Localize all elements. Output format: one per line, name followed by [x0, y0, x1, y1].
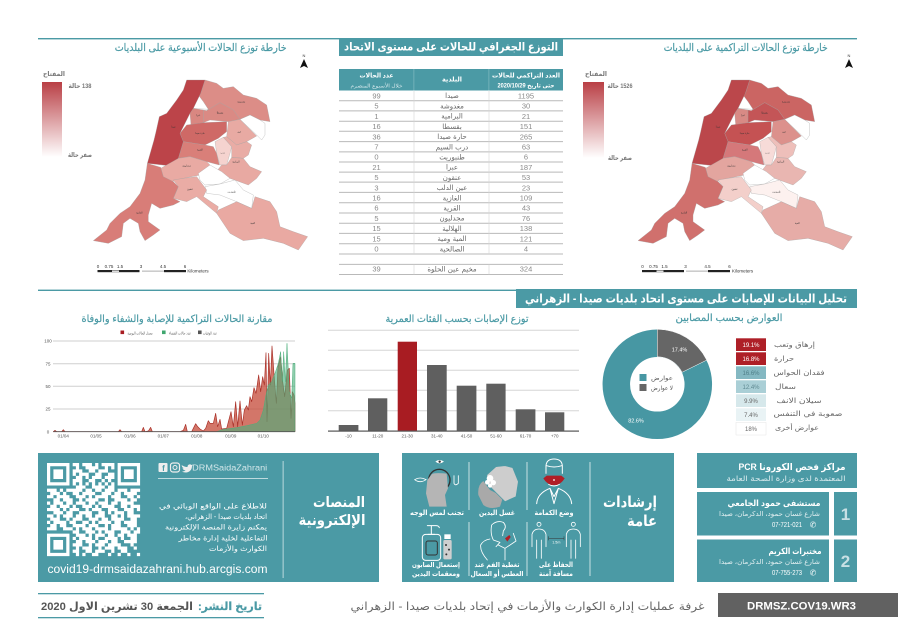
map title: weekly: خارطة توزع الحالات الأسبوعية على البلديات	[115, 41, 287, 54]
scale bar: weekly: 1.5	[117, 264, 124, 269]
map legend: cumulative: المفتاح	[585, 71, 607, 78]
table rows: صيدا	[445, 92, 459, 100]
x axis labels: 01/10	[258, 434, 269, 438]
choropleth map: cumulative: طنبوريت	[772, 190, 781, 193]
table rows: 16	[372, 122, 381, 131]
social rule	[158, 477, 268, 480]
table grid	[339, 101, 563, 274]
platforms title	[298, 495, 366, 529]
choropleth map: cumulative: درب	[765, 151, 770, 154]
number 1	[834, 492, 857, 536]
y axis labels: 75	[45, 361, 51, 366]
symptom list: 12.4%	[742, 385, 760, 391]
chart legend: عدد الوفيات	[203, 332, 217, 336]
choropleth map: weekly	[93, 80, 308, 250]
platform description: الكوارث والأزمات	[209, 544, 267, 553]
table rows: القرية	[443, 204, 461, 212]
table rows: 5	[374, 214, 379, 223]
table rows: حارة صيدا	[437, 133, 467, 141]
choropleth map: cumulative: عنقون	[732, 188, 738, 191]
choropleth map: cumulative: عين	[782, 130, 787, 133]
table rows: 53	[522, 173, 530, 182]
choropleth map: weekly: عين	[237, 130, 242, 133]
x axis labels: 31-40	[431, 434, 443, 438]
footer: report code: DRMSZ.COV19.WR3	[747, 600, 856, 612]
panel: PCR centres	[697, 453, 857, 582]
icon: wash hands	[478, 466, 518, 508]
panel: cumulative comparison chart	[44, 314, 295, 438]
number 1: 1	[841, 505, 850, 524]
chart title: توزع الإصابات بحسب الفئات العمرية	[386, 314, 529, 325]
table rows: 16	[372, 194, 381, 202]
table rows: 76	[522, 214, 530, 223]
donut chart	[616, 329, 707, 425]
panel: weekly cases map	[42, 41, 308, 274]
choropleth map: weekly: مغدوشة	[237, 101, 246, 104]
symptom list: صعوبة في التنفس	[774, 411, 843, 418]
label: cover mouth: العطس أو السعال	[470, 569, 524, 578]
x axis labels: 01/05	[90, 434, 102, 438]
dividers	[469, 462, 590, 576]
platform description: للاطلاع على الواقع الوبائي في	[159, 502, 267, 510]
choropleth map: cumulative: المية	[795, 222, 800, 225]
scale bar: cumulative: 6	[728, 264, 731, 269]
table rows: 324	[520, 265, 532, 274]
table rows: 5	[374, 173, 379, 182]
choropleth map: weekly: بقسطا	[216, 111, 224, 114]
table rows: 63	[522, 142, 530, 152]
scale bar: weekly: 0	[97, 264, 100, 269]
table rows: 15	[372, 234, 381, 243]
footer: operations room: غرفة عمليات إدارة الكوارث والأزمات في إتحاد بلديات صيدا - الزهراني	[350, 599, 705, 613]
symptom list: سعال	[775, 384, 796, 391]
donut chart: 82.6%	[628, 418, 644, 424]
centre 1: مستشفى حمود الجامعي	[728, 498, 820, 509]
section rule	[38, 290, 516, 291]
choropleth map: cumulative: مجدليون	[727, 165, 736, 168]
table rows: عنقون	[443, 174, 461, 182]
choropleth map: weekly: حارة صيدا	[195, 132, 205, 135]
icon: north arrow: N	[303, 53, 306, 58]
chart grid	[53, 341, 295, 409]
donut chart: لا عوارض	[651, 385, 673, 392]
panel: age group bar chart	[328, 314, 579, 438]
choropleth map: cumulative: عبرا	[741, 114, 746, 117]
choropleth map: weekly: القرية	[197, 149, 203, 152]
chart legend	[120, 330, 217, 336]
table rows: 99	[372, 91, 381, 100]
table rows: مغدوشة	[440, 102, 464, 110]
map legend: cumulative: صفر حالة	[608, 155, 632, 162]
table rows: المية ومية	[437, 235, 467, 243]
icon: safe distance	[532, 522, 580, 558]
panel: online platforms	[38, 453, 379, 582]
choropleth map: weekly: المية	[250, 222, 255, 225]
platform description: يمكنم زايرة المنصة الإلكترونية	[165, 522, 267, 532]
table rows: 0	[374, 245, 379, 254]
label: soap and sanitizer: إستعمال الصابون	[412, 562, 460, 569]
symptom list: إرهاق وتعب	[774, 342, 815, 349]
PCR header: مراكز فحص الكورونا PCR	[738, 462, 846, 473]
social handle: DRMSaidaZahrani	[192, 464, 267, 472]
table rows: طنبوريت	[439, 154, 465, 162]
table rows: 1195	[518, 91, 534, 100]
map title: cumulative: خارطة توزع الحالات التراكمية على البلديات	[664, 42, 828, 54]
x axis labels: 01/09	[225, 434, 237, 438]
table header: البلدية	[442, 76, 462, 84]
scale bar: weekly: 0.75	[105, 264, 114, 269]
table rows: الغازية	[443, 194, 461, 202]
x axis labels: 01/06	[124, 434, 136, 438]
scale bar: cumulative: 0.75	[649, 264, 658, 269]
donut chart: عوارض	[651, 375, 673, 382]
section heading: data analysis	[516, 289, 857, 308]
table header: حتى تاريخ 2020/10/29	[498, 82, 554, 90]
map legend: cumulative: 1526 حالة	[608, 83, 633, 90]
table header: عدد الحالات	[360, 72, 394, 80]
label: safe distance: الحفاظ على	[539, 562, 573, 569]
social handle	[158, 463, 267, 473]
symptom list: حرارة	[774, 356, 794, 363]
choropleth map: weekly: طنبوريت	[227, 190, 236, 193]
table rows: 23	[522, 183, 530, 192]
table rows: عبرا	[446, 164, 458, 172]
centre 1	[697, 492, 829, 536]
icon: north arrow	[300, 53, 308, 68]
platform description: اتحاد بلديات صيدا - الزهراني،	[185, 512, 267, 521]
section heading: data analysis: تحليل البيانات للإصابات على مستوى اتحاد بلديات صيدا - الزهراني	[525, 292, 847, 306]
centre 1: ✆	[810, 520, 817, 530]
choropleth map: cumulative: حارة صيدا	[740, 132, 750, 135]
symptom list: 16.6%	[742, 371, 760, 377]
label: wash hands: غسل اليدين	[479, 510, 515, 517]
table rows: 21	[522, 112, 530, 121]
centre 1: شارع غسان حمود، الدكرمان، صيدا	[719, 510, 820, 518]
guidance title: عامة	[627, 513, 657, 530]
symptom list: عوارض أخرى	[775, 423, 819, 432]
scale bar: cumulative: Kilometers	[732, 268, 754, 274]
panel: cases table	[339, 69, 563, 274]
icon: north arrow	[845, 53, 853, 68]
chart title: مقارنة الحالات التراكمية للإصابة والشفاء والوفاة	[82, 314, 272, 325]
y axis labels: 100	[44, 339, 52, 344]
symptom list	[736, 338, 843, 435]
choropleth map: weekly: البرامية	[232, 160, 240, 163]
chart legend: عدد حالات الشفاء	[169, 332, 191, 336]
scale bar: cumulative	[641, 264, 754, 274]
scale bar: cumulative: 4.5	[704, 264, 711, 269]
x axis labels: 61-70	[520, 434, 532, 438]
icon: safe distance: 1.5m	[552, 541, 560, 545]
x axis labels: 70+	[551, 434, 559, 438]
choropleth map: cumulative: مغدوشة	[782, 101, 791, 104]
x axis labels: 10-	[345, 434, 352, 438]
icon: north arrow: N	[848, 53, 851, 58]
y axis labels: 25	[45, 407, 51, 412]
centre 1: 07-721-021	[772, 522, 802, 529]
table rows: 6	[524, 153, 528, 162]
top rule right	[563, 38, 857, 39]
x axis labels: 11-20	[372, 434, 384, 438]
scale bar: weekly: 3	[140, 264, 143, 269]
footer: report code	[718, 593, 898, 617]
table rows: مخيم عين الحلوة	[427, 266, 477, 274]
bars	[339, 342, 564, 431]
platform description: التفاعلية لخلية إدارة مخاطر	[177, 534, 268, 542]
symptom list: سيلان الانف	[776, 398, 822, 405]
area series	[53, 343, 295, 432]
label: soap and sanitizer	[412, 562, 460, 578]
x axis labels: 01/07	[158, 434, 169, 438]
y axis labels	[44, 339, 52, 434]
choropleth map: weekly: مجدليون	[183, 165, 192, 168]
scale bar: cumulative: 0	[641, 264, 644, 269]
table rows: عين الدلب	[437, 184, 467, 192]
centre 2: شارع غسان حمود، الدكرمان، صيدا	[719, 558, 820, 566]
table rows: 1	[374, 112, 379, 121]
table rows: 4	[524, 245, 528, 254]
chart legend: معدل الحالات اليومية	[128, 332, 152, 336]
choropleth map: cumulative: القرية	[742, 149, 748, 152]
table rows: 5	[374, 102, 379, 111]
table rows: 0	[374, 153, 379, 162]
baseline	[328, 430, 579, 432]
QR code	[47, 465, 140, 554]
label: safe distance: مسافة آمنة	[539, 569, 573, 578]
choropleth map: weekly: صيدا	[171, 125, 176, 128]
label: soap and sanitizer: ومعقمات اليدين	[412, 571, 460, 578]
chart title: العوارض بحسب المصابين	[676, 313, 782, 324]
scale bar: cumulative: 3	[684, 264, 687, 269]
symptom list: 18%	[745, 427, 758, 433]
symptom list: 19.1%	[742, 343, 760, 349]
panel: symptoms	[616, 313, 843, 435]
table rows: 121	[520, 234, 532, 243]
footer: publication date	[38, 593, 264, 618]
scale bar: cumulative: 1.5	[661, 264, 668, 269]
scale bar: weekly: 4.5	[160, 264, 167, 269]
choropleth map: cumulative: البرامية	[777, 160, 785, 163]
table rows: 187	[520, 163, 532, 172]
x axis labels: 01/08	[191, 434, 203, 438]
table header	[339, 69, 563, 90]
table rows: درب السيم	[436, 143, 468, 151]
icon: wear mask	[537, 459, 572, 504]
footer: publication date: تاريخ النشر:	[198, 601, 262, 613]
table rows: الصالحية	[440, 245, 464, 253]
table rows: 39	[372, 265, 381, 274]
table rows: 3	[374, 183, 379, 192]
centre 2: 07-755-273	[772, 570, 802, 577]
table rows: 151	[520, 122, 532, 131]
table rows: 138	[520, 224, 532, 233]
scale bar: weekly: Kilometers	[187, 268, 209, 274]
icon: cover mouth	[481, 522, 516, 560]
top rule left	[38, 38, 339, 39]
table rows: 36	[372, 132, 381, 141]
table rows: 30	[522, 102, 530, 111]
symptom list: 9.9%	[744, 399, 758, 405]
table rows: 265	[520, 132, 532, 141]
map legend: weekly: 138 حالة	[68, 83, 92, 90]
choropleth map: weekly: درب	[220, 151, 225, 154]
table rows: بقسطا	[442, 123, 462, 131]
table rows: البرامية	[441, 113, 463, 121]
social handle: f	[162, 464, 165, 473]
label: wear mask: وضع الكمامة	[534, 509, 574, 517]
x axis labels: 01/04	[58, 434, 69, 438]
table rows: 21	[372, 163, 381, 172]
table rows: 7	[374, 142, 379, 152]
map legend: cumulative	[583, 71, 633, 162]
table column dividers	[414, 91, 489, 274]
centre 2: ✆	[810, 568, 817, 578]
centre 2	[697, 540, 829, 582]
symptom list: 16.8%	[742, 357, 760, 363]
platforms title: المنصات	[313, 495, 365, 511]
symptom list: 7.4%	[744, 413, 758, 419]
table header: العدد التراكمي للحالات	[492, 72, 560, 80]
centre 2: مختبرات الكريم	[768, 546, 822, 557]
x axis labels: 21-30	[402, 434, 414, 438]
guidance title: إرشادات	[603, 494, 657, 511]
scale bar: weekly: 6	[184, 264, 187, 269]
map legend: weekly: صفر حالة	[68, 152, 92, 159]
chart grid	[328, 330, 579, 411]
panel: cumulative cases map	[583, 42, 853, 274]
divider	[282, 461, 284, 578]
y axis labels: 0	[47, 429, 50, 434]
x axis labels: 41-50	[461, 434, 473, 438]
icon: avoid touching face	[415, 460, 458, 507]
table rows: 43	[522, 204, 530, 213]
platform description	[159, 502, 268, 553]
scale bar: weekly	[97, 264, 209, 274]
x axis labels	[345, 434, 559, 438]
table rows: 6	[374, 204, 379, 213]
heading: geographic distribution	[339, 38, 563, 56]
choropleth map: cumulative: صيدا	[716, 125, 720, 128]
table rows: الهلالية	[442, 225, 462, 233]
x axis labels: 51-60	[490, 434, 502, 438]
choropleth map: cumulative: بقسطا	[761, 111, 768, 114]
number 2: 2	[841, 552, 850, 571]
panel: general guidance	[402, 453, 674, 582]
PCR header	[697, 453, 857, 488]
label: cover mouth	[470, 562, 524, 578]
choropleth map: weekly: عنقون	[187, 188, 194, 191]
table rows: 109	[520, 194, 532, 202]
choropleth map: weekly: عبرا	[196, 114, 201, 117]
map legend: weekly	[42, 71, 92, 159]
table header: خلال الأسبوع المنصرم	[350, 82, 402, 90]
symptom list: فقدان الحواس	[774, 370, 824, 377]
y axis labels: 50	[45, 384, 51, 389]
icon: soap and sanitizer	[422, 526, 452, 560]
choropleth map: cumulative: الغازية	[681, 211, 687, 214]
platform URL: covid19-drmsaidazahrani.hub.arcgis.com	[48, 564, 268, 576]
table rows	[372, 91, 534, 274]
label: cover mouth: تغطية الفم عند	[474, 562, 520, 569]
number 2	[834, 540, 857, 582]
x axis labels	[58, 434, 269, 438]
platforms title: الإلكترونية	[298, 513, 366, 529]
label: avoid touching face: تجنب لمس الوجه	[410, 510, 464, 517]
map legend: weekly: المفتاح	[43, 71, 65, 78]
heading: geographic distribution: التوزع الجغرافي للحالات على مستوى الاتحاد	[344, 42, 558, 54]
table rows: مجدليون	[440, 215, 465, 223]
guidance title	[603, 494, 657, 530]
donut chart: 17.4%	[672, 348, 687, 354]
label: safe distance	[539, 562, 573, 578]
choropleth map: weekly: الغازية	[136, 211, 143, 214]
footer: publication date: الجمعة 30 تشرين الاول 2020	[41, 601, 193, 613]
PCR header: المعتمدة لدى وزارة الصحة العامة	[726, 474, 846, 483]
table rows: 15	[372, 224, 381, 233]
choropleth map: cumulative	[638, 80, 852, 250]
